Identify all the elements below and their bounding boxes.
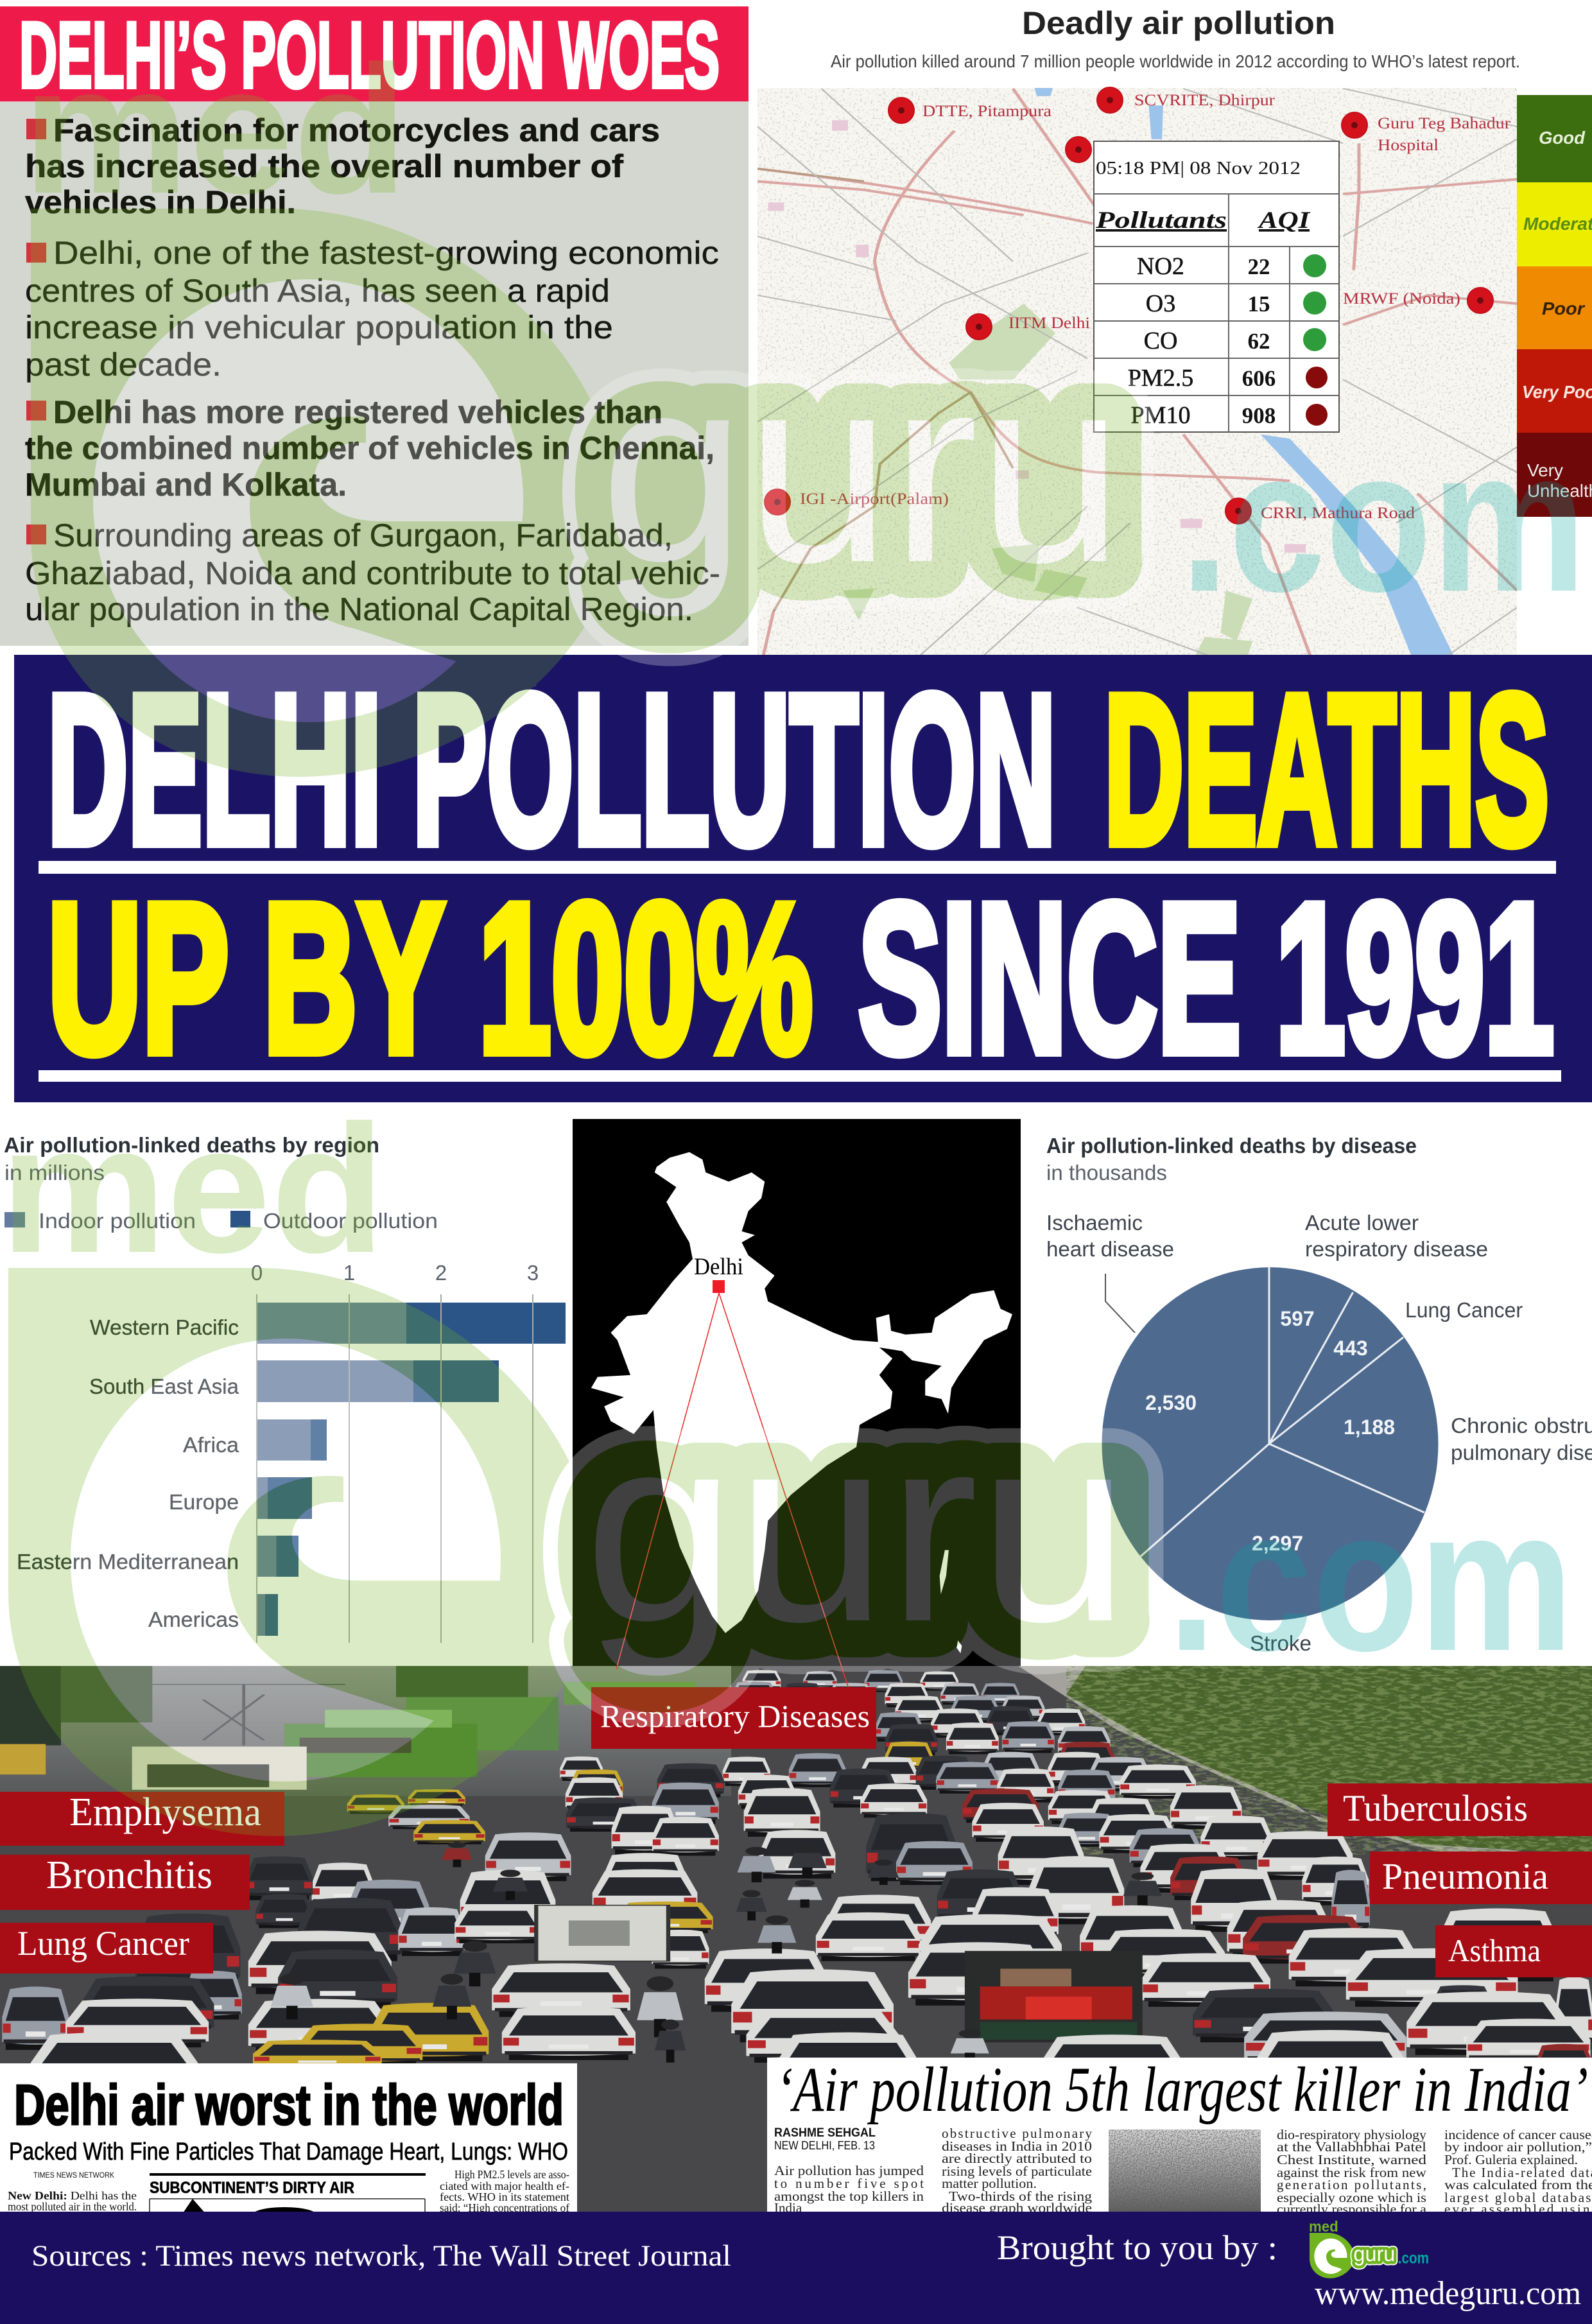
pie values: 2,530 xyxy=(1145,1391,1197,1414)
pie chart: deaths by disease: in thousands xyxy=(1046,1161,1167,1184)
AQI table: CO xyxy=(1144,327,1177,354)
axis numbers: 0 xyxy=(251,1261,263,1285)
watermark logo: lower: med xyxy=(0,1088,385,1291)
brought to you by: Brought to you by : xyxy=(997,2228,1277,2267)
watermark logo: lower: guru xyxy=(584,1379,1130,1679)
newspaper clipping: Delhi air worst in the world: Delhi air worst in the world xyxy=(14,2073,564,2137)
newspaper clipping: Air pollution 5th largest killer in India: at the Vallabhbhai Patel xyxy=(1277,2139,1426,2155)
newspaper clipping: Air pollution 5th largest killer in India: matter pollution. xyxy=(942,2176,1037,2191)
AQI table: 05:18 PM| 08 Nov 2012 xyxy=(1096,158,1301,178)
bullet point 4: ular population in the National Capital Region. xyxy=(25,591,693,627)
sources: Sources : Times news network, The Wall Street Journal xyxy=(31,2239,731,2273)
map station labels: Hospital xyxy=(1378,137,1439,154)
disease label: Emphysema xyxy=(0,1791,284,1846)
pie labels: heart disease xyxy=(1046,1237,1174,1261)
Delhi marker: Delhi xyxy=(694,1254,743,1280)
newspaper clipping: Delhi air worst in the world xyxy=(0,2063,577,2223)
pie labels: Stroke xyxy=(1250,1631,1311,1655)
bar chart: deaths by region: in millions xyxy=(4,1161,105,1184)
bullet point 4 xyxy=(25,517,720,627)
newspaper clipping: Air pollution 5th largest killer in India: obstructive pulmonary xyxy=(942,2126,1093,2141)
footer logo xyxy=(1309,2219,1429,2278)
region labels xyxy=(17,1315,239,1631)
pie values: 443 xyxy=(1333,1337,1368,1360)
region labels: South East Asia xyxy=(89,1374,239,1398)
disease label: Respiratory Diseases: Respiratory Diseases xyxy=(600,1698,870,1734)
watermark logo: lower: guru xyxy=(584,1379,1130,1679)
map station labels xyxy=(800,92,1511,522)
watermark logo: lower xyxy=(0,1088,1573,1836)
AQI table: AQI xyxy=(1258,207,1311,234)
newspaper clipping: Air pollution 5th largest killer in India: to number five spot xyxy=(774,2176,924,2191)
trees xyxy=(1066,1664,1592,1855)
pie labels xyxy=(1046,1211,1592,1655)
disease label: Lung Cancer: Lung Cancer xyxy=(17,1924,189,1963)
disease label: Bronchitis xyxy=(0,1853,250,1910)
disease label: Tuberculosis xyxy=(1328,1783,1592,1836)
AQI table: PM2.5 xyxy=(1128,365,1193,392)
bullet point 4: Ghaziabad, Noida and contribute to total vehic- xyxy=(25,555,720,591)
newspaper clipping: Delhi air worst in the world: ciated with major health ef- xyxy=(440,2180,569,2192)
newspaper clipping: Air pollution 5th largest killer in India: by indoor air pollution,” xyxy=(1444,2139,1592,2155)
disease label: Respiratory Diseases xyxy=(591,1687,876,1749)
disease label: Emphysema: Emphysema xyxy=(69,1791,261,1834)
newspaper clipping: Delhi air worst in the world: said: “High concentrations of xyxy=(440,2201,569,2214)
title bar: Delhi's pollution woes: DELHI’S POLLUTION WOES xyxy=(19,3,720,107)
bullet point 3 xyxy=(25,394,714,503)
pie labels: Ischaemic xyxy=(1046,1211,1143,1235)
chart legend xyxy=(4,1209,438,1233)
banner: Delhi pollution deaths up by 100% since 1991 xyxy=(14,651,1592,1102)
map station pins xyxy=(765,87,1493,524)
newspaper clipping: Delhi air worst in the world: Packed With Fine Particles That Damage Heart, Lungs: WHO xyxy=(9,2138,568,2165)
newspaper photo xyxy=(1109,2129,1261,2216)
map station labels: MRWF (Noida) xyxy=(1343,290,1460,308)
AQI table: 22 xyxy=(1248,254,1270,279)
watermark logo: upper: med xyxy=(22,28,408,232)
watermark logo: upper: guru xyxy=(600,320,1123,620)
AQI table: 606 xyxy=(1242,366,1276,391)
disease label: Tuberculosis: Tuberculosis xyxy=(1343,1787,1528,1829)
newspaper clipping: Air pollution 5th largest killer in India: generation pollutants, xyxy=(1277,2177,1426,2192)
bullet point 2: centres of South Asia, has seen a rapid xyxy=(25,273,610,309)
bullet point 3: Mumbai and Kolkata. xyxy=(25,467,347,503)
axis numbers: 3 xyxy=(527,1261,539,1285)
newspaper clipping: Air pollution 5th largest killer in India: Air pollution has jumped xyxy=(774,2163,924,2178)
region labels: Europe xyxy=(169,1490,239,1514)
pie values: 2,297 xyxy=(1252,1532,1303,1555)
map station labels: Guru Teg Bahadur xyxy=(1378,115,1511,132)
disease label: Asthma xyxy=(1435,1925,1592,1977)
bullet point 1: has increased the overall number of xyxy=(25,148,623,184)
newspaper clipping: Air pollution 5th largest killer in India: was calculated from the xyxy=(1444,2177,1592,2192)
bullet point 2: past decade. xyxy=(25,347,221,383)
disease label: Pneumonia: Pneumonia xyxy=(1382,1855,1548,1897)
AQI table: PM10 xyxy=(1131,402,1190,429)
motorcyclists xyxy=(442,1842,472,1867)
newspaper clipping: Delhi air worst in the world: New Delhi: Delhi has the xyxy=(8,2189,137,2202)
AQI scale legend: Poor xyxy=(1542,299,1586,318)
AQI scale legend xyxy=(1517,95,1592,517)
bullet point 2: increase in vehicular population in the xyxy=(25,309,613,345)
axis numbers: 2 xyxy=(435,1261,447,1285)
map of India xyxy=(573,1119,1021,1688)
newspaper clipping: Air pollution 5th largest killer in India: disease graph worldwide xyxy=(942,2200,1092,2216)
newspaper clipping: Air pollution 5th largest killer in India: diseases in India in 2010 xyxy=(942,2138,1092,2154)
far cars xyxy=(742,1670,781,1687)
footer logo: guru xyxy=(1353,2242,1395,2266)
watermark logo: upper: guru xyxy=(600,320,1123,620)
title bar: Delhi's pollution woes xyxy=(0,3,748,107)
newspaper clipping: Air pollution 5th largest killer in India: rising levels of particulate xyxy=(942,2164,1092,2179)
footer logo: med xyxy=(1309,2219,1338,2235)
pie slices xyxy=(1102,1267,1438,1620)
pie labels: Lung Cancer xyxy=(1405,1298,1523,1322)
newspaper clipping: Delhi air worst in the world: fects. WHO in its statement xyxy=(440,2190,569,2203)
newspaper clipping: Air pollution 5th largest killer in India: RASHME SEHGAL xyxy=(774,2126,876,2140)
watermark logo: upper: guru xyxy=(600,320,1123,620)
newspaper clipping: Delhi air worst in the world: SUBCONTINENT’S DIRTY AIR xyxy=(150,2179,354,2197)
axis numbers xyxy=(251,1261,539,1285)
subheading: WHO report: Air pollution killed around 7 million people worldwide in 2012 according to WHO’s latest report. xyxy=(831,51,1520,71)
map station labels: CRRI, Mathura Road xyxy=(1261,505,1415,522)
stacked bars xyxy=(257,1303,566,1636)
bullet point 3: Delhi has more registered vehicles than xyxy=(53,394,662,430)
AQI scale legend: Good xyxy=(1539,128,1586,148)
bar chart: deaths by region: Air pollution-linked deaths by region xyxy=(4,1133,379,1157)
region labels: Americas xyxy=(148,1608,239,1631)
footer logo: .com xyxy=(1398,2250,1429,2268)
pie chart: deaths by disease: Air pollution-linked deaths by disease xyxy=(1046,1134,1417,1158)
watermark logo: upper xyxy=(22,28,1586,777)
newspaper clipping: Air pollution 5th largest killer in India: are directly attributed to xyxy=(942,2151,1092,2166)
pie labels: respiratory disease xyxy=(1305,1237,1488,1261)
AQI table: Pollutants xyxy=(1095,207,1227,234)
newspaper clipping: Air pollution 5th largest killer in India: Two-thirds of the rising xyxy=(949,2189,1093,2204)
map station labels: IITM Delhi xyxy=(1008,315,1090,332)
bullet point 2 xyxy=(25,235,719,383)
disease label: Pneumonia xyxy=(1370,1851,1592,1904)
disease label: Bronchitis: Bronchitis xyxy=(46,1853,212,1897)
pie values xyxy=(1145,1307,1395,1555)
map station labels: IGI -Airport(Palam) xyxy=(800,490,949,508)
AQI table xyxy=(1094,141,1339,432)
chart legend: Indoor pollution xyxy=(39,1209,196,1233)
disease label: Asthma: Asthma xyxy=(1448,1932,1541,1968)
map station labels: SCVRITE, Dhirpur xyxy=(1134,92,1276,109)
newspaper clipping: Air pollution 5th largest killer in India: amongst the top killers in xyxy=(774,2189,924,2204)
white box truck xyxy=(536,1905,668,1961)
newspaper clipping: Air pollution 5th largest killer in India: currently responsible for a xyxy=(1277,2201,1427,2217)
footer logo: guru xyxy=(1353,2242,1395,2266)
bar chart: deaths by region xyxy=(4,1133,566,1643)
map: Delhi air monitoring stations xyxy=(757,87,1517,658)
bullet point 2: Delhi, one of the fastest-growing economic xyxy=(53,235,719,271)
footer xyxy=(0,2212,1592,2324)
bullet point 1 xyxy=(25,112,660,220)
pie values: 1,188 xyxy=(1344,1416,1395,1439)
buses xyxy=(0,1682,696,1790)
newspaper clipping: Air pollution 5th largest killer in India: India xyxy=(774,2200,802,2216)
AQI scale legend: Very xyxy=(1527,460,1563,480)
panel: Delhi's pollution woes xyxy=(0,3,748,646)
watermark logo: lower: guru xyxy=(584,1379,1130,1679)
newspaper clipping: Air pollution 5th largest killer in India: against the risk from new xyxy=(1277,2165,1427,2180)
axis numbers: 1 xyxy=(343,1261,355,1285)
yellow autos near xyxy=(369,2003,489,2061)
Delhi marker xyxy=(616,1254,849,1688)
newspaper clipping: Air pollution 5th largest killer in India: incidence of cancer caused xyxy=(1444,2127,1592,2142)
traffic photo xyxy=(0,1664,1592,2218)
chart legend: Outdoor pollution xyxy=(263,1209,438,1233)
newspaper clipping: Air pollution 5th largest killer in India: especially ozone which is xyxy=(1277,2190,1426,2205)
AQI table: 15 xyxy=(1248,291,1270,317)
newspaper clipping: Delhi air worst in the world: TIMES NEWS NETWORK xyxy=(33,2171,114,2180)
newspaper clipping: Air pollution 5th largest killer in India: Chest Institute, warned xyxy=(1277,2152,1427,2167)
region labels: Eastern Mediterranean xyxy=(17,1550,239,1574)
newspaper clipping: Air pollution 5th largest killer in India: Prof. Guleria explained. xyxy=(1444,2152,1578,2167)
region labels: Africa xyxy=(183,1433,239,1457)
bullet point 3: the combined number of vehicles in Chennai, xyxy=(25,430,714,466)
heading: Deadly air pollution: Deadly air pollution xyxy=(1022,5,1335,41)
disease label: Lung Cancer xyxy=(0,1923,213,1973)
road strip xyxy=(1018,1666,1521,1851)
dark truck with red crates xyxy=(965,1951,1143,2042)
AQI table: O3 xyxy=(1146,290,1175,317)
bullet point 4: Surrounding areas of Gurgaon, Faridabad, xyxy=(53,517,673,553)
banner: Delhi pollution deaths up by 100% since 1991: UP BY 100% xyxy=(48,860,813,1097)
pie labels: Acute lower xyxy=(1305,1211,1419,1235)
AQI table: NO2 xyxy=(1137,253,1184,280)
AQI table: 908 xyxy=(1242,403,1276,428)
pie chart: deaths by disease xyxy=(1046,1134,1592,1655)
yellow autos far xyxy=(347,1794,404,1814)
AQI table: 62 xyxy=(1248,329,1270,354)
newspaper clipping: Delhi air worst in the world: most polluted air in the world. xyxy=(8,2200,137,2213)
bullet point 1: Fascination for motorcycles and cars xyxy=(53,112,660,148)
map station labels: DTTE, Pitampura xyxy=(922,103,1051,120)
website: www.medeguru.com xyxy=(1315,2275,1581,2312)
pie values: 597 xyxy=(1280,1307,1315,1330)
newspaper clipping: Delhi air worst in the world: High PM2.5 levels are asso- xyxy=(454,2168,569,2181)
newspaper clipping: Air pollution 5th largest killer in India xyxy=(767,2054,1592,2218)
bullet point 1: vehicles in Delhi. xyxy=(25,184,296,220)
region labels: Western Pacific xyxy=(90,1315,239,1339)
footer logo: guru xyxy=(1353,2242,1395,2266)
newspaper clipping: Air pollution 5th largest killer in India: dio-respiratory physiology xyxy=(1277,2127,1427,2142)
newspaper clipping: Air pollution 5th largest killer in India: NEW DELHI, FEB. 13 xyxy=(774,2139,875,2152)
